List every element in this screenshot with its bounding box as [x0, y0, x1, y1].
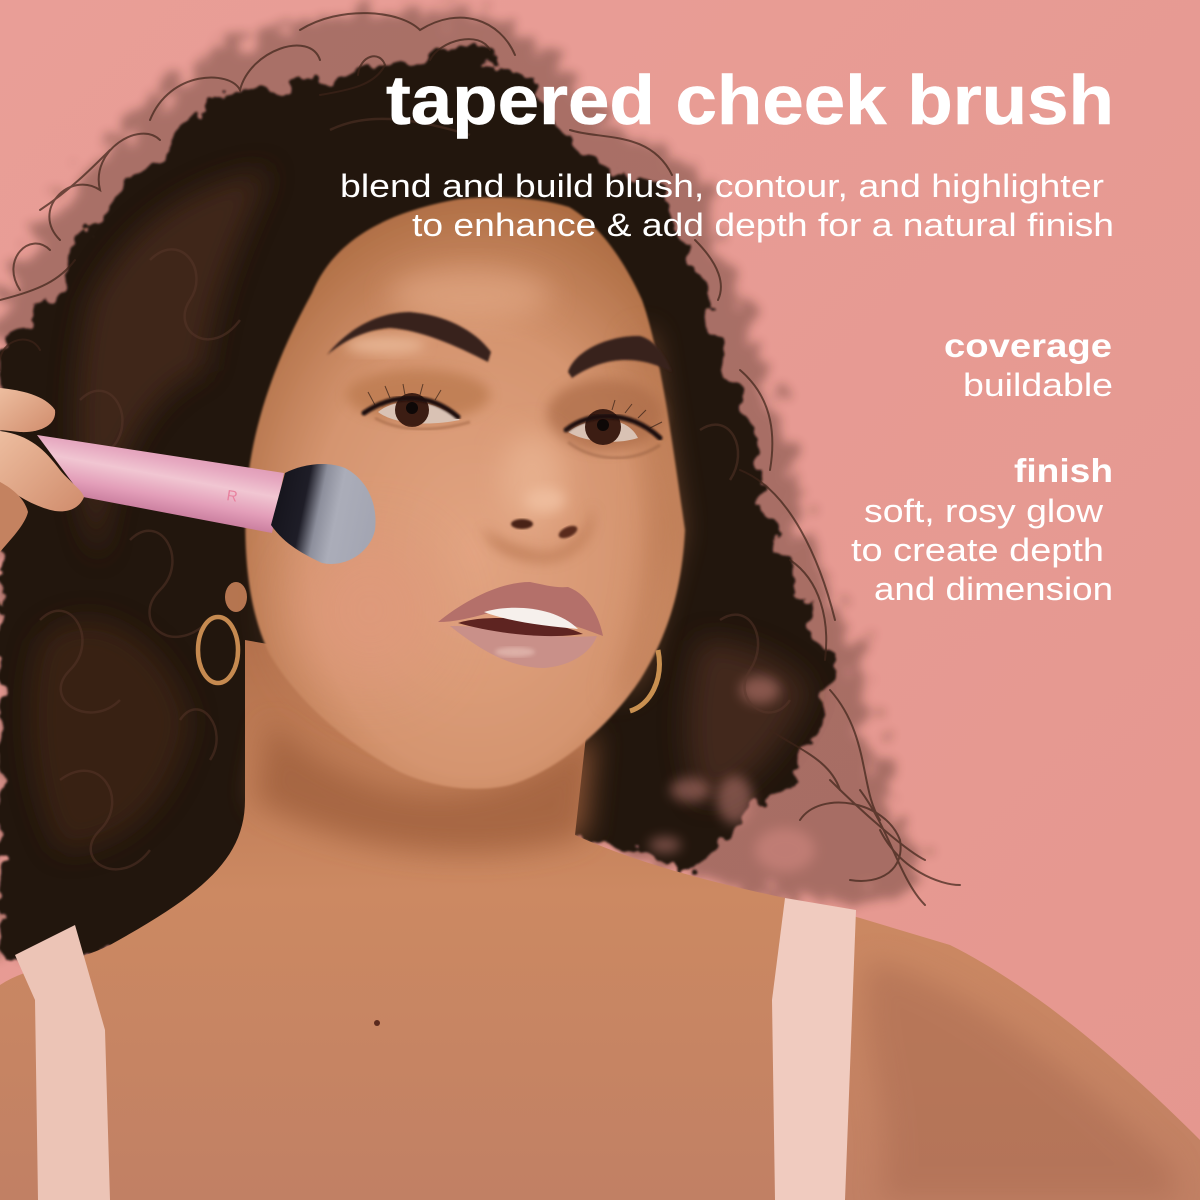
forehead glow: [390, 269, 550, 321]
finish: [851, 452, 1113, 607]
left eye: [364, 384, 470, 429]
strap right: [772, 898, 856, 1200]
right eyebrow: [568, 336, 672, 378]
right earring: [630, 650, 659, 711]
subtitle: blend and build blush, contour, and highlighter: [340, 168, 1104, 204]
finish: to create depth: [851, 532, 1104, 568]
dense hair: [0, 48, 835, 965]
right eyeshadow: [547, 379, 663, 451]
brush: [37, 435, 376, 564]
finish: soft, rosy glow: [864, 493, 1104, 529]
coverage: coverage: [944, 327, 1112, 364]
right eye: [566, 400, 662, 458]
loose curls: [0, 13, 960, 905]
subtitle: [340, 168, 1114, 243]
coverage: buildable: [963, 367, 1113, 403]
mouth: [438, 582, 603, 668]
mole: [374, 1020, 380, 1026]
neck and torso: [0, 640, 1200, 1200]
finish: and dimension: [874, 571, 1113, 607]
lower finger: [0, 431, 84, 511]
subtitle: to enhance & add depth for a natural finish: [412, 207, 1114, 243]
hair lights: [76, 170, 270, 560]
cheek blush: [300, 535, 440, 685]
brush logo: R: [225, 487, 239, 506]
left eyebrow: [327, 312, 491, 362]
palm: [0, 482, 28, 552]
hand: [0, 388, 84, 552]
brow bone: [345, 336, 425, 354]
strap left: [15, 925, 110, 1200]
hair strands: [40, 119, 790, 869]
left eyeshadow: [346, 369, 490, 421]
pink gaps through lower right curls: [649, 676, 815, 872]
coverage: [944, 327, 1113, 403]
shoulder shading: [865, 960, 1180, 1200]
nose: [483, 434, 594, 562]
brush bristles: [271, 464, 376, 564]
left earring: [198, 617, 238, 683]
brush handle: [37, 435, 284, 533]
loose outer hair: [0, 8, 925, 960]
finish: finish: [1014, 452, 1113, 489]
neck shadow: [255, 720, 595, 853]
hair: [0, 8, 960, 965]
upper finger: [0, 388, 55, 432]
right face shadow: [610, 330, 680, 700]
ear: [225, 582, 247, 612]
title: tapered cheek brush: [386, 61, 1114, 139]
face: [245, 197, 685, 789]
